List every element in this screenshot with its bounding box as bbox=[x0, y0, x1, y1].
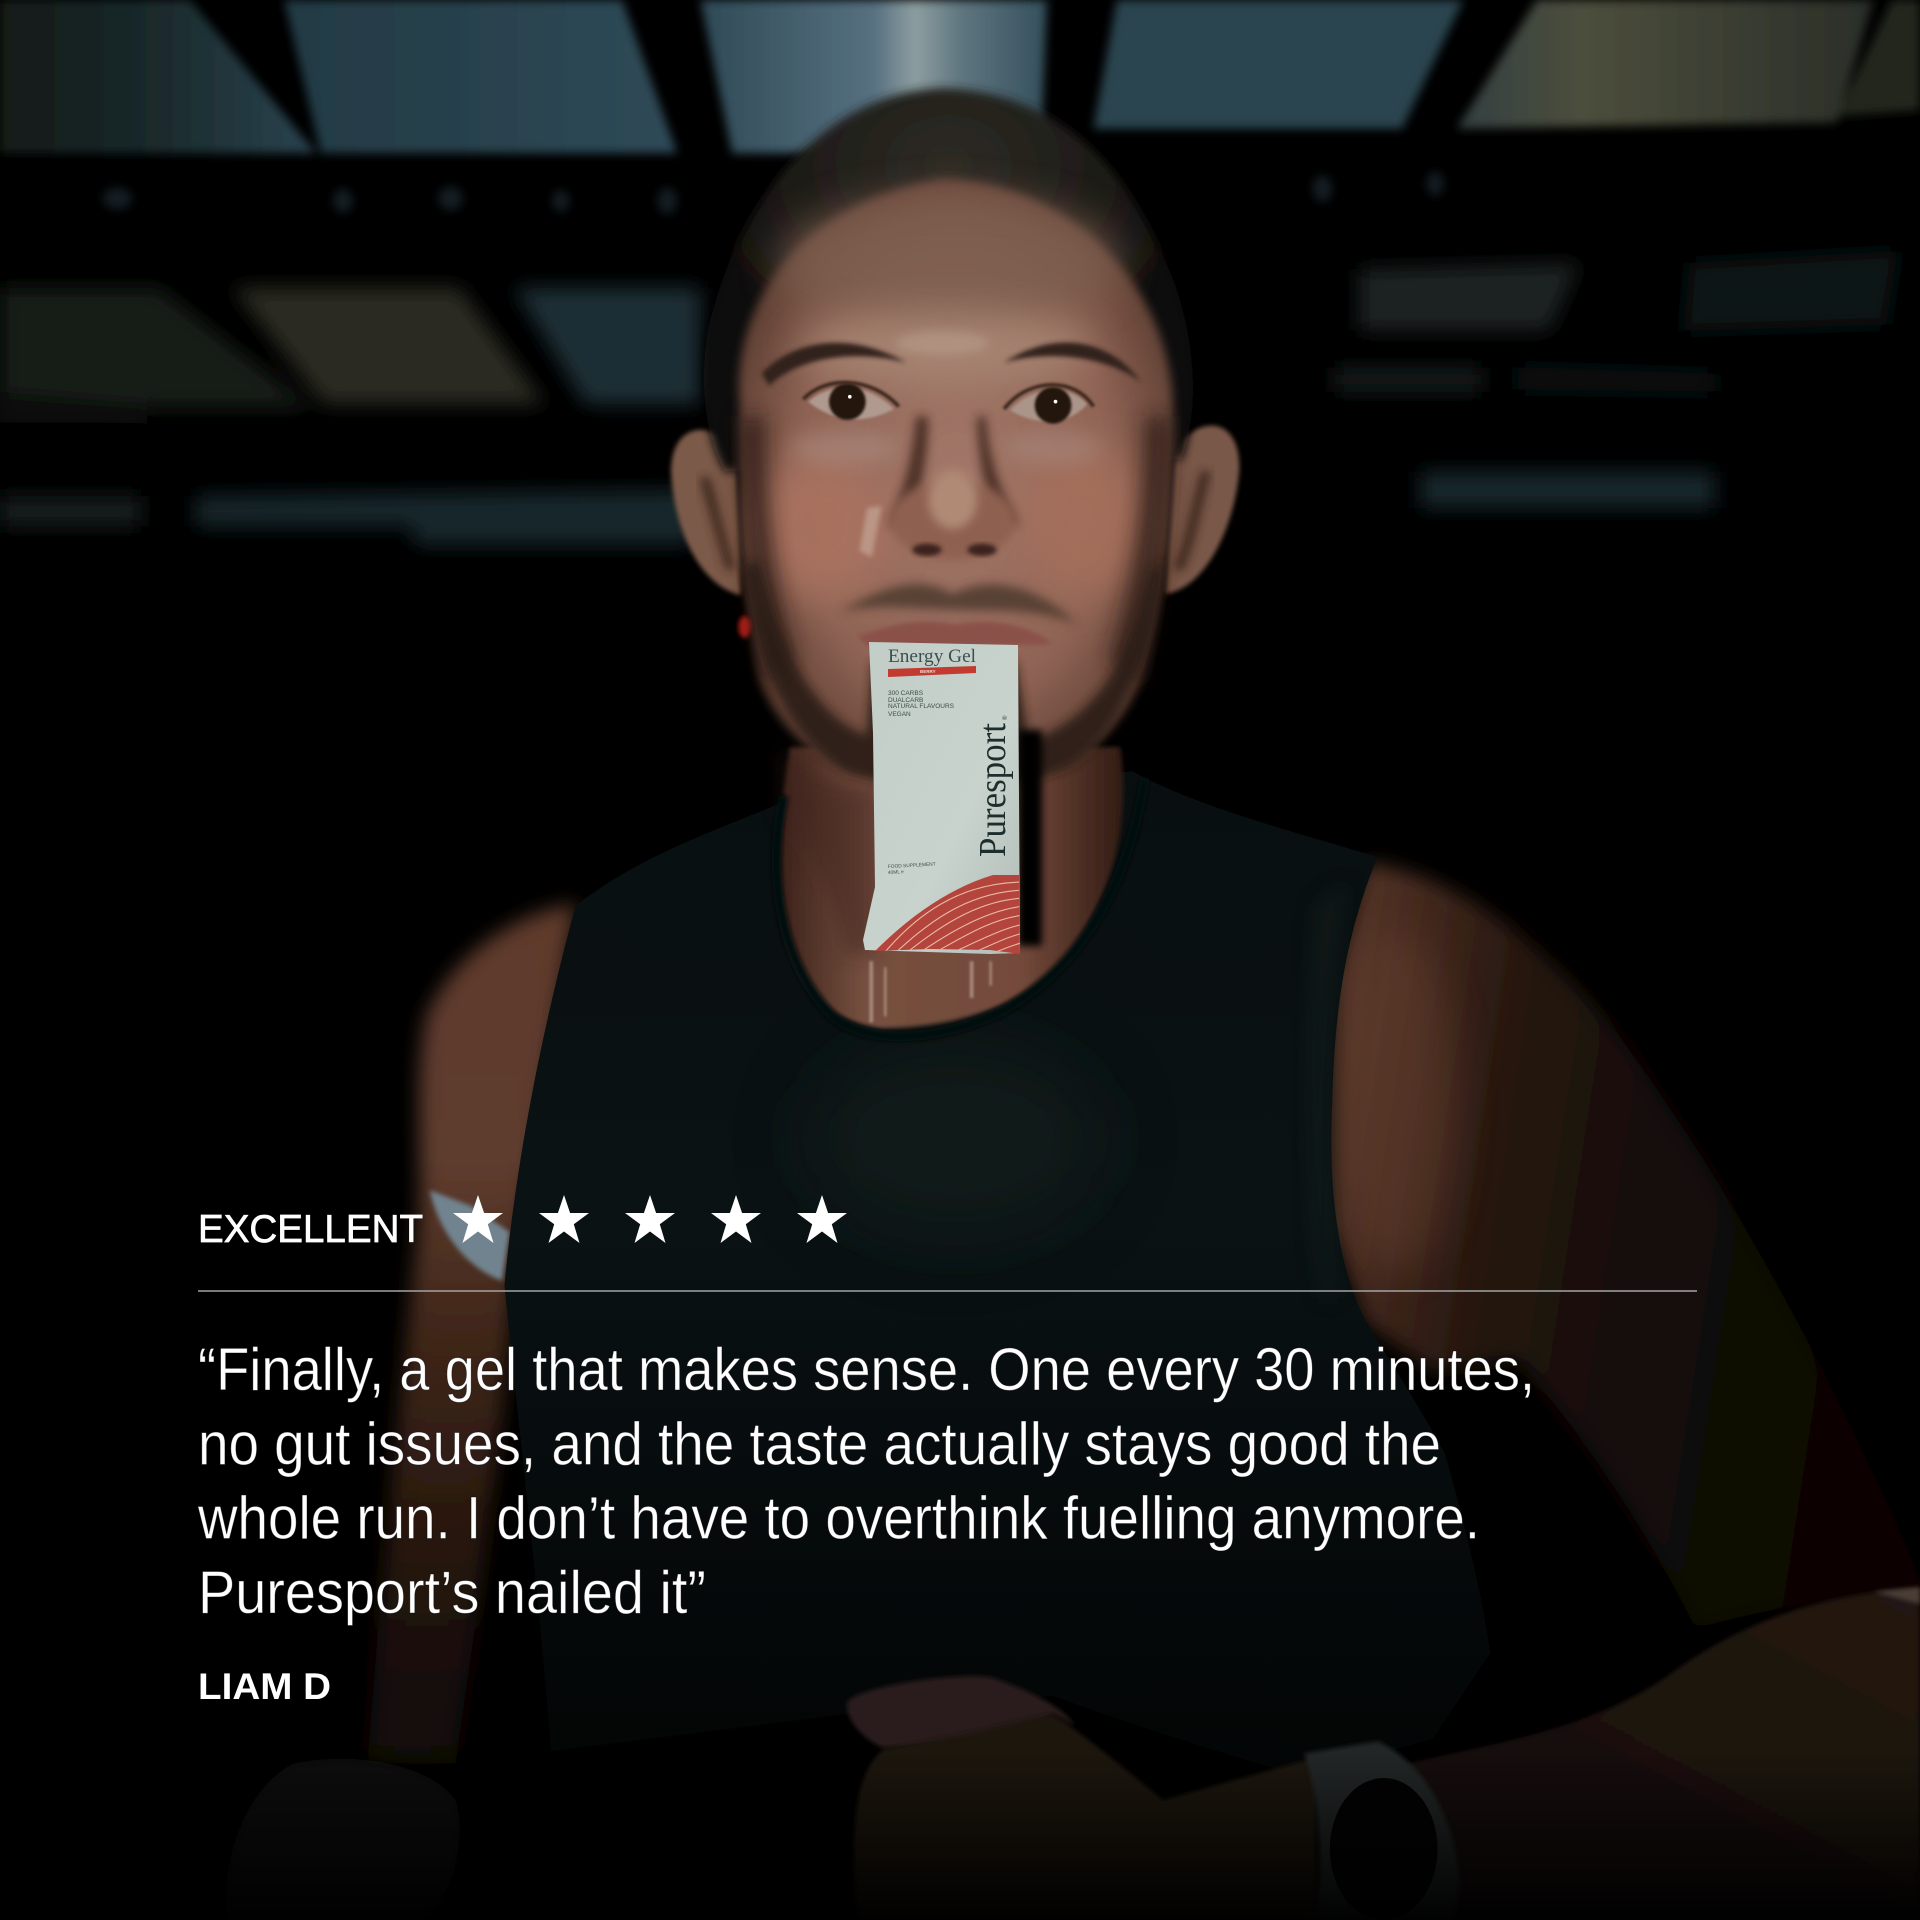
forearm bbox=[1298, 1588, 1920, 1920]
forearm rim light bbox=[1873, 1587, 1920, 1604]
supplement note: 40ML e bbox=[888, 869, 904, 876]
nose shadows bbox=[889, 416, 928, 527]
forehead bbox=[778, 196, 1120, 331]
collar bbox=[777, 778, 1145, 1036]
neck bbox=[778, 747, 1123, 1029]
pouch features: DUALCARB bbox=[888, 697, 923, 704]
testimonial quote: no gut issues, and the taste actually stays good the bbox=[198, 1410, 1441, 1478]
upper ceiling panels bbox=[0, 0, 1920, 153]
face edge shadow left bbox=[740, 416, 796, 686]
under eye bbox=[791, 431, 899, 465]
rating label: EXCELLENT bbox=[198, 1208, 423, 1251]
pouch features: 300 CARBS bbox=[888, 690, 924, 697]
star 1 bbox=[453, 1195, 503, 1243]
fingers bbox=[847, 1676, 1075, 1749]
head hair bbox=[704, 88, 1193, 471]
moustache bbox=[839, 584, 1078, 624]
supplement note: FOOD SUPPLEMENT bbox=[888, 862, 936, 870]
brow glow bbox=[798, 312, 1092, 386]
pouch shadow bbox=[1018, 730, 1042, 946]
brand name: Puresport bbox=[972, 723, 1014, 857]
beard bbox=[744, 557, 1163, 786]
lips bbox=[857, 622, 1053, 649]
cheek right bbox=[1020, 444, 1147, 596]
nostrils bbox=[912, 544, 997, 556]
face edge shadow right bbox=[1108, 416, 1172, 686]
star 4 bbox=[711, 1195, 761, 1243]
right hand bbox=[854, 1714, 1316, 1920]
flavour bar: BERRY bbox=[920, 669, 936, 674]
ears bbox=[671, 426, 1239, 595]
right arm bbox=[1298, 863, 1920, 1920]
registered mark: ® bbox=[1002, 715, 1009, 720]
red wave graphic bbox=[875, 875, 1020, 954]
testimonial quote: Puresport’s nailed it” bbox=[198, 1559, 706, 1626]
cheek left bbox=[749, 453, 891, 600]
left hand bbox=[226, 1759, 460, 1920]
star 5 bbox=[797, 1195, 847, 1243]
pouch features: VEGAN bbox=[888, 711, 911, 718]
chest fabric highlight bbox=[808, 1041, 1102, 1237]
gel pouch bbox=[860, 642, 1025, 960]
reviewer name: LIAM D bbox=[198, 1666, 331, 1707]
supplement note bbox=[888, 862, 936, 876]
forehead sweat bbox=[896, 331, 989, 355]
pouch features bbox=[888, 690, 955, 718]
right strap highlight bbox=[1308, 882, 1347, 1298]
sweat on cheek bbox=[860, 506, 882, 557]
red earplug bbox=[738, 616, 751, 638]
left eye bbox=[803, 382, 899, 420]
neck shadow bbox=[784, 747, 877, 955]
left shoulder and arm bbox=[367, 904, 578, 1763]
armband bbox=[430, 1190, 509, 1281]
testimonial quote: “Finally, a gel that makes sense. One every 30 minutes, bbox=[198, 1336, 1535, 1403]
left eyebrow bbox=[762, 343, 906, 386]
sweat drips bbox=[869, 961, 992, 1022]
lower ceiling panels bbox=[0, 251, 1898, 545]
testimonial quote: whole run. I don’t have to overthink fuelling anymore. bbox=[197, 1484, 1480, 1552]
tank top bbox=[504, 771, 1490, 1776]
upper arm highlight bbox=[1335, 931, 1457, 1273]
beam lights bbox=[103, 171, 1444, 214]
product name: Energy Gel bbox=[888, 646, 976, 667]
watch bbox=[1304, 1741, 1460, 1920]
pouch body bbox=[863, 642, 1020, 954]
right eye bbox=[1004, 385, 1093, 424]
bottom fade bbox=[0, 1751, 1920, 1920]
star 2 bbox=[539, 1195, 589, 1243]
nose bbox=[889, 481, 1016, 560]
star 3 bbox=[625, 1195, 675, 1243]
face bbox=[739, 179, 1173, 786]
star rating bbox=[453, 1195, 847, 1243]
pouch features: NATURAL FLAVOURS bbox=[888, 703, 955, 710]
right eyebrow bbox=[1004, 343, 1141, 382]
testimonial quote bbox=[197, 1336, 1535, 1626]
flavour bar bbox=[888, 666, 976, 677]
